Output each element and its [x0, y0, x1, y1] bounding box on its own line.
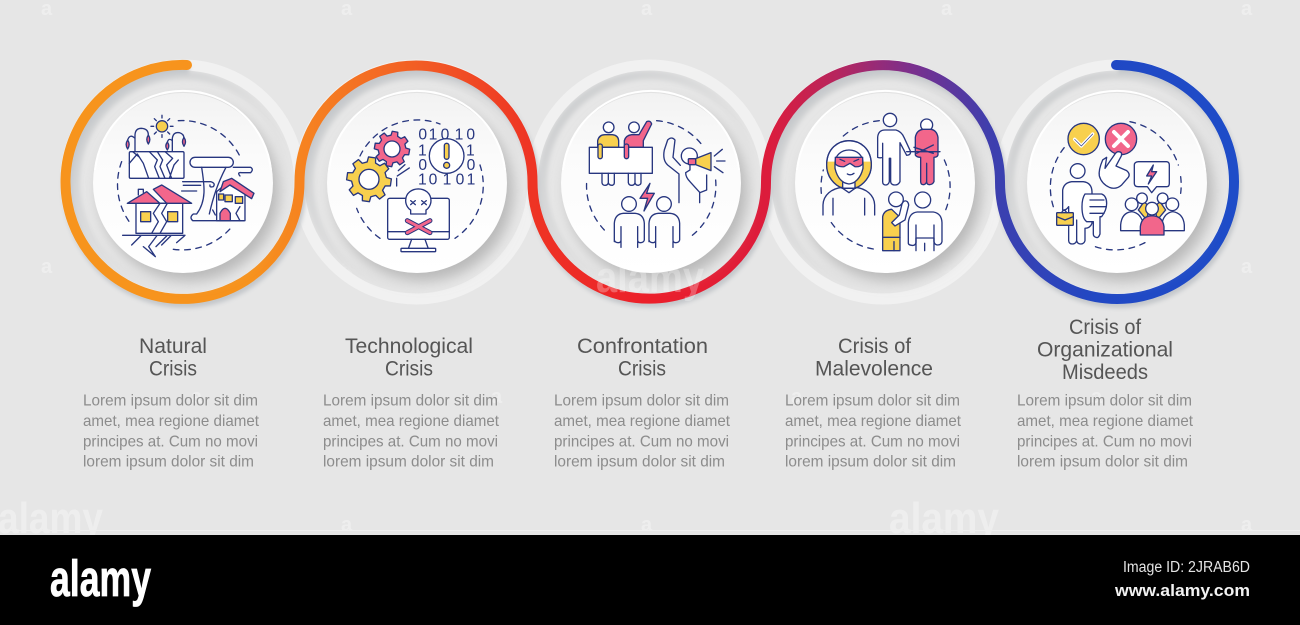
body text 1: lorem ipsum dolor sit dim	[83, 454, 254, 470]
body text 5: principes at. Cum no movi	[1017, 434, 1192, 450]
title: Confrontation Crisis: Confrontation	[577, 335, 708, 358]
body text 1: principes at. Cum no movi	[83, 434, 258, 450]
body text 5: lorem ipsum dolor sit dim	[1017, 454, 1188, 470]
icon: natural disasters	[118, 115, 254, 257]
disc 1	[93, 91, 279, 281]
watermarks: a	[41, 256, 53, 278]
panel: Crisis of Malevolence	[785, 91, 981, 471]
watermarks: a	[191, 386, 203, 408]
body text 2: Lorem ipsum dolor sit dim	[323, 392, 498, 410]
title: Natural Crisis: Natural	[139, 335, 207, 358]
panel: Technological Crisis	[323, 91, 513, 471]
title: Confrontation Crisis: Crisis	[618, 358, 666, 380]
body text 1: amet, mea regione diamet	[83, 413, 260, 430]
body text 2: amet, mea regione diamet	[323, 413, 500, 430]
logo: alamy: alamy	[50, 550, 151, 607]
icon: technology failure	[344, 120, 483, 252]
watermarks: alamy	[0, 494, 103, 543]
disc 5	[1027, 91, 1213, 281]
watermarks: a	[791, 386, 803, 408]
watermarks: a	[941, 256, 953, 278]
watermarks: a	[1091, 386, 1103, 408]
body text 4: lorem ipsum dolor sit dim	[785, 454, 956, 470]
title: Technological Crisis: Technological	[345, 335, 473, 358]
panel: Crisis of Organizational Misdeeds	[1017, 91, 1213, 470]
ribbon shadow	[68, 69, 1236, 303]
icon: technology failure: 11	[418, 143, 475, 160]
ring backgrounds	[66, 65, 1234, 299]
disc 3	[561, 91, 747, 281]
body text 4: amet, mea regione diamet	[785, 413, 962, 430]
title: Technological Crisis: Crisis	[385, 358, 433, 380]
title: Natural Crisis: Crisis	[149, 358, 197, 380]
watermarks: a	[491, 386, 503, 408]
body text 3: lorem ipsum dolor sit dim	[554, 454, 725, 470]
icon: organizational misdeeds	[1050, 122, 1184, 250]
icon: malevolence	[821, 113, 950, 251]
watermarks: alamy	[889, 494, 999, 543]
disc 2	[327, 91, 513, 281]
body text 5: amet, mea regione diamet	[1017, 413, 1194, 430]
title: Crisis of Malevolence: Malevolence	[815, 358, 933, 380]
body text 4: principes at. Cum no movi	[785, 434, 960, 450]
body text 2: lorem ipsum dolor sit dim	[323, 454, 494, 470]
body text 2: principes at. Cum no movi	[323, 434, 498, 450]
image id: Image ID: 2JRAB6D	[1123, 559, 1250, 576]
body text 3: amet, mea regione diamet	[554, 413, 731, 430]
icon: confrontation	[587, 121, 725, 247]
panel: Confrontation Crisis	[554, 91, 747, 471]
panel: Natural Crisis	[83, 91, 279, 470]
title: Crisis of Malevolence: Crisis of	[838, 335, 911, 358]
icon: technology failure: 01010	[418, 126, 475, 143]
title: Crisis of Organizational Misdeeds: Crisis of	[1069, 316, 1141, 339]
body text 5: Lorem ipsum dolor sit dim	[1017, 392, 1192, 410]
website: www.alamy.com	[1114, 581, 1250, 600]
disc 4	[795, 91, 981, 281]
body text 3: Lorem ipsum dolor sit dim	[554, 392, 729, 410]
body text 3: principes at. Cum no movi	[554, 434, 729, 450]
icon: technology failure: 10101	[418, 171, 475, 188]
body text 1: Lorem ipsum dolor sit dim	[83, 392, 258, 410]
watermarks: a	[341, 256, 353, 278]
watermarks: a	[641, 514, 653, 536]
title: Crisis of Organizational Misdeeds: Misdeeds	[1062, 361, 1148, 384]
watermarks: a	[341, 514, 353, 536]
connecting gradient ribbon	[66, 65, 1234, 299]
watermarks: a	[1241, 256, 1253, 278]
title: Crisis of Organizational Misdeeds: Organizational	[1037, 338, 1173, 362]
body text 4: Lorem ipsum dolor sit dim	[785, 392, 960, 410]
watermarks: a	[1241, 514, 1253, 536]
icon: technology failure: 00	[418, 157, 476, 174]
footer bar	[0, 530, 1300, 625]
watermarks over discs: alamy	[596, 253, 704, 302]
